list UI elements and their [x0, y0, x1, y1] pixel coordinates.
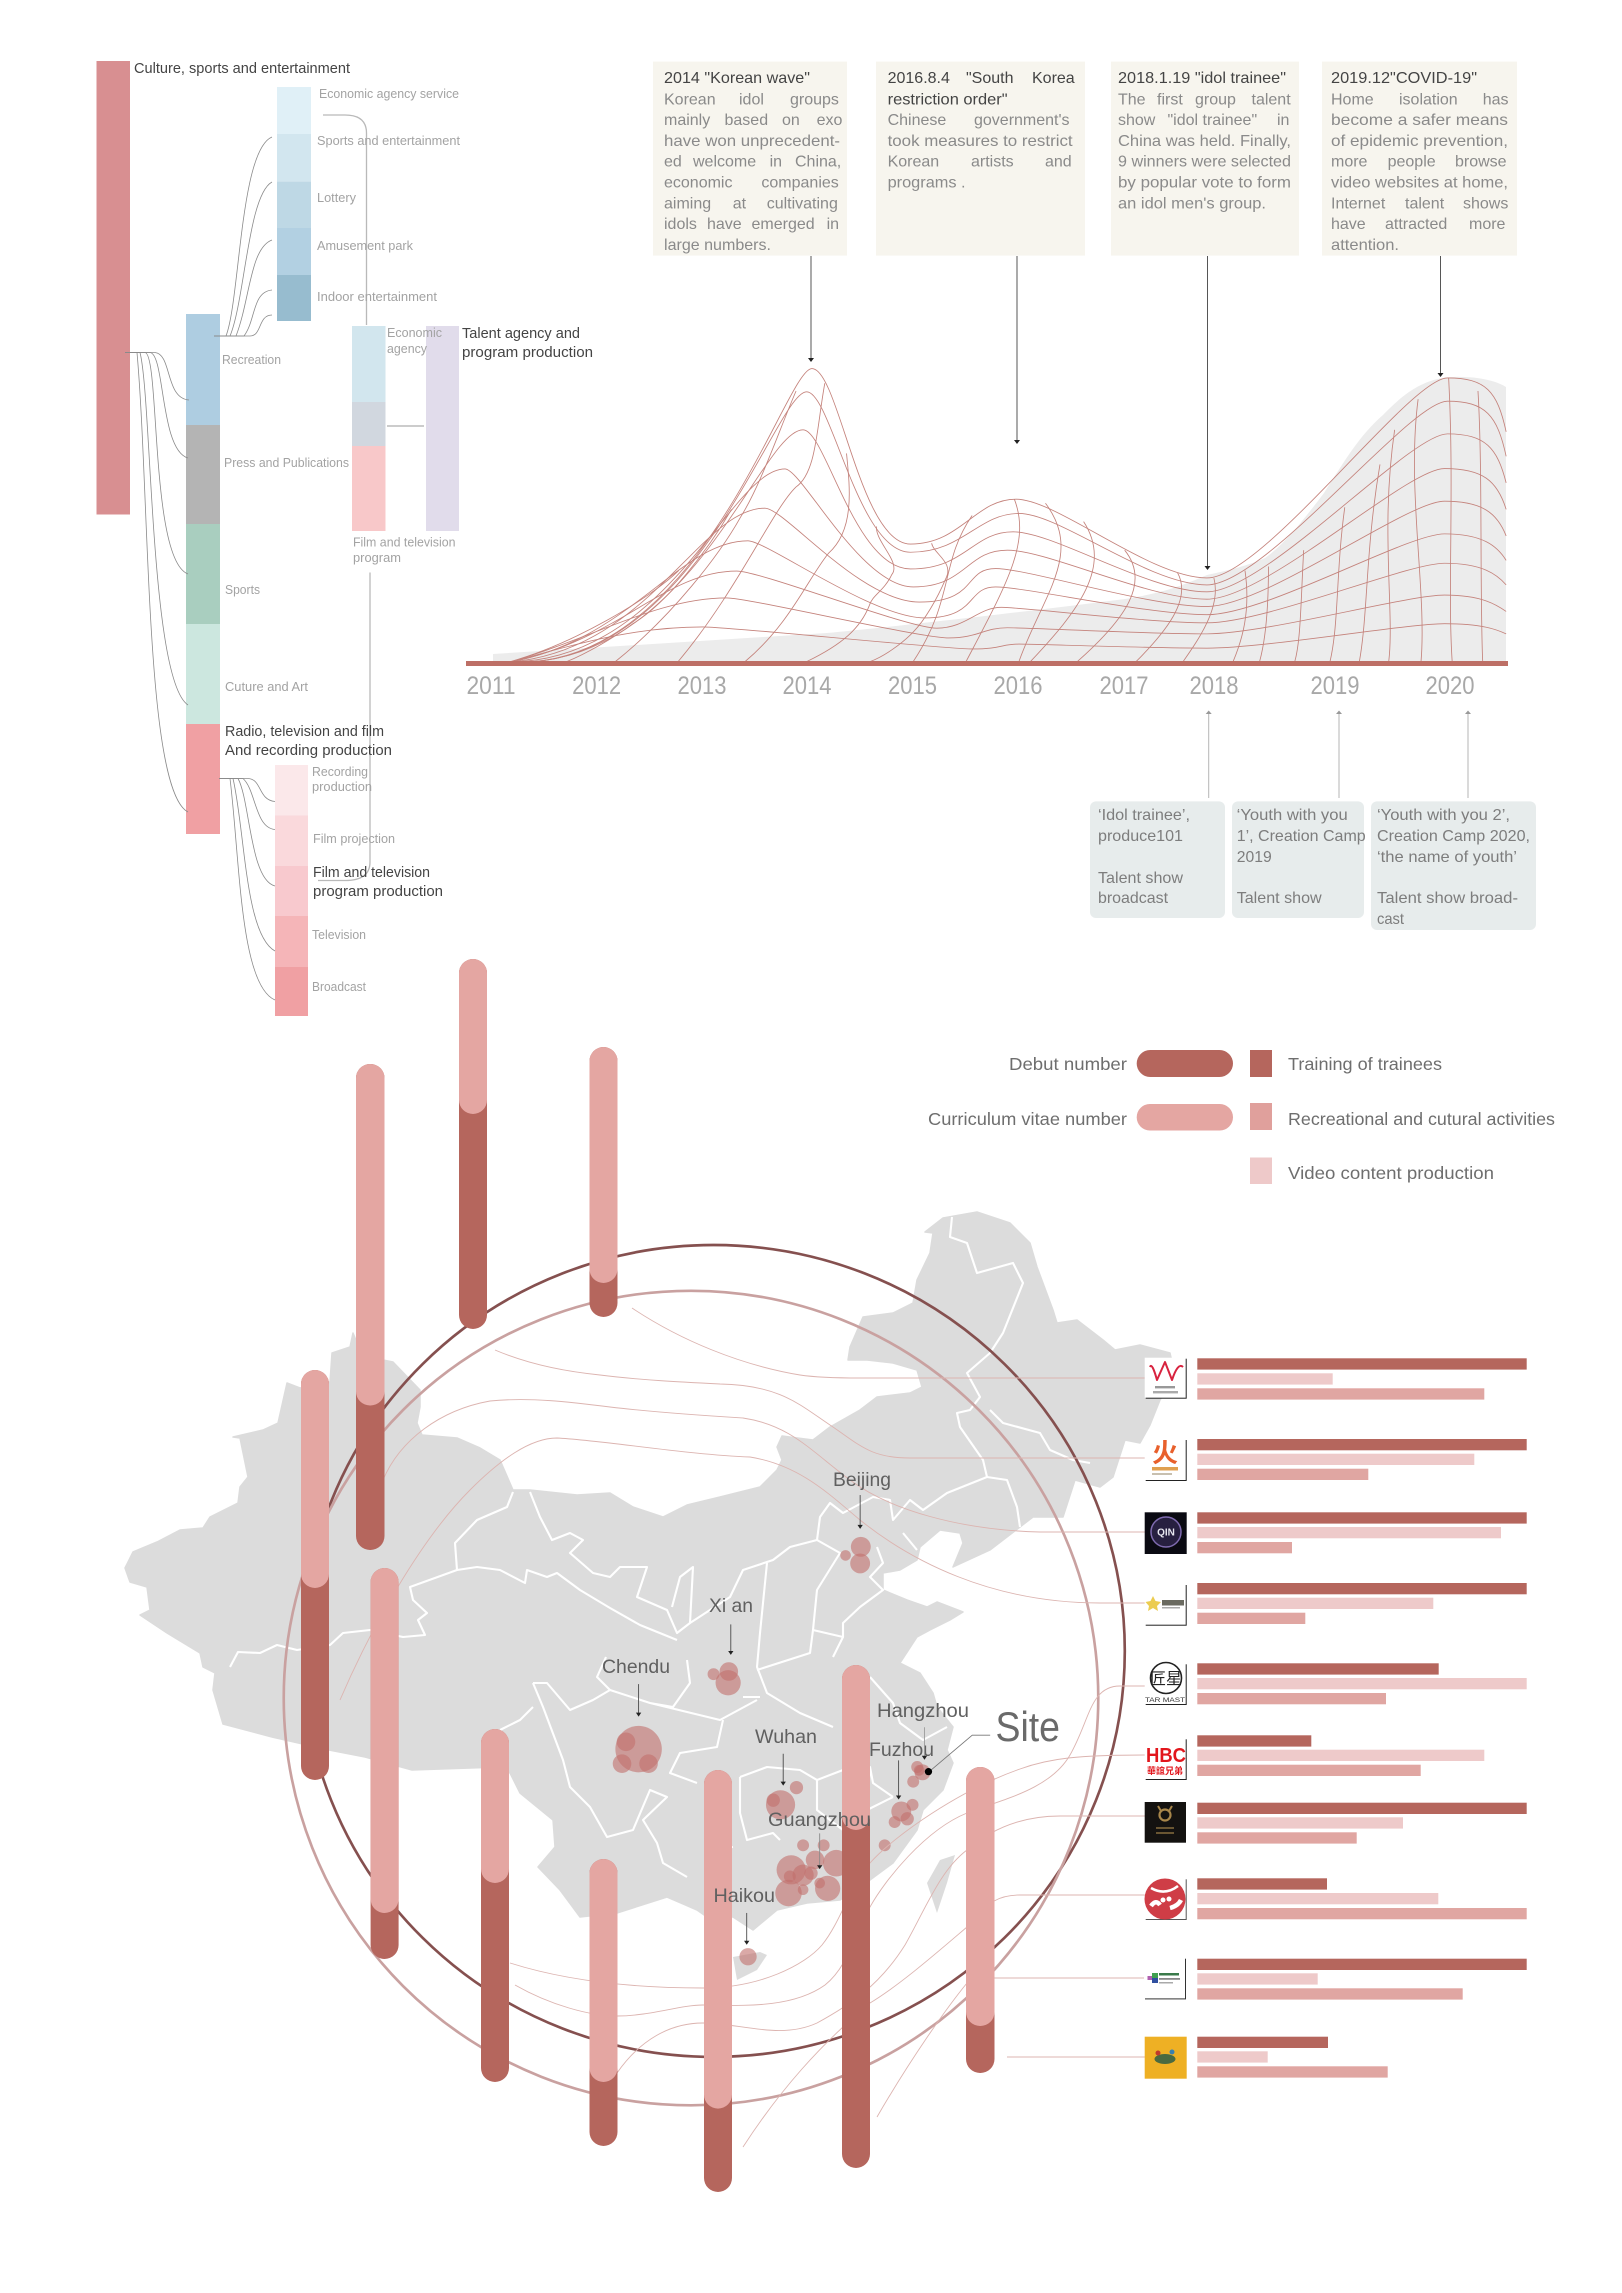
- logo: red circle: [1144, 1878, 1187, 1920]
- callout: 2014 Korean wave: on: [782, 112, 800, 129]
- callout: 2018 programmes: Talent show: [1098, 870, 1183, 887]
- callout: 2014 Korean wave: based: [724, 112, 768, 129]
- callout: 2019 programmes: 2019: [1237, 849, 1272, 866]
- callout: 2019 COVID-19: attracted: [1385, 216, 1447, 233]
- legend: Curriculum vitae number: [928, 1109, 1127, 1129]
- city labels and arrows: Haikou: [714, 1885, 775, 1907]
- pill: bar 3: [459, 959, 487, 1329]
- connector curves: main to sectors: [125, 352, 189, 812]
- callout: 2016 South Korea restriction order: Korea: [1032, 70, 1075, 87]
- callout: 2016 South Korea restriction order: Korean: [888, 154, 939, 170]
- callout: 2019 COVID-19: attention.: [1331, 237, 1399, 254]
- grey background area: [493, 377, 1506, 661]
- pill: bar 7: [590, 1859, 618, 2146]
- callout: 2020 programmes: cast: [1377, 911, 1405, 928]
- callout: 2019 COVID-19: of epidemic prevention,: [1331, 133, 1508, 150]
- labels: classification tree: Lottery: [317, 190, 356, 205]
- year axis labels: 2017: [1100, 672, 1148, 700]
- callout: 2016 South Korea restriction order: artists: [971, 154, 1014, 170]
- callout: 2019 COVID-19: [1322, 62, 1517, 256]
- year axis labels: 2016: [994, 672, 1042, 700]
- labels: classification tree: Film projection: [313, 831, 395, 846]
- callout: 2019 COVID-19: browse: [1455, 154, 1507, 170]
- callout: 2018 idol trainee: "idol trainee": [1168, 112, 1257, 129]
- callout: 2014 Korean wave: aiming: [664, 196, 711, 212]
- labels: classification tree: Economic: [387, 325, 442, 340]
- callout: 2014 Korean wave: cultivating: [767, 196, 838, 212]
- labels: classification tree: program production: [462, 344, 593, 361]
- row: company 10: [1145, 2037, 1388, 2079]
- callout: 2019 COVID-19: shows: [1463, 196, 1508, 212]
- logo: HBC: HBC: [1146, 1745, 1186, 1767]
- callout: 2018 idol trainee: China was held. Finally,: [1118, 133, 1291, 150]
- city labels and arrows: Beijing: [833, 1469, 891, 1491]
- callout: 2016 South Korea restriction order: [876, 62, 1085, 256]
- logo: HBC: [1145, 1738, 1187, 1780]
- row: company 6: [1145, 1735, 1484, 1780]
- pill: bar 2: [356, 1064, 384, 1550]
- city labels and arrows: Site: [996, 1703, 1060, 1750]
- row: company 8: [1144, 1878, 1527, 1920]
- labels: classification tree: Sports: [225, 582, 260, 597]
- logo: star master: [1145, 1662, 1187, 1705]
- callout: 2016 South Korea restriction order: and: [1045, 154, 1072, 170]
- labels: classification tree: Film and television: [313, 864, 430, 881]
- callout: 2018 programmes: ‘Idol trainee’,: [1098, 807, 1190, 824]
- callout: 2016 South Korea restriction order: Chinese: [888, 112, 946, 129]
- arrows: programmes to years: [1206, 710, 1471, 798]
- callout: 2018 idol trainee: 2018.1.19 "idol trainee": [1118, 70, 1286, 87]
- callout: 2019 COVID-19: more: [1331, 154, 1368, 170]
- callout: 2019 COVID-19: people: [1388, 154, 1436, 170]
- callout: 2016 South Korea restriction order: programs .: [888, 174, 966, 192]
- callout: 2018 idol trainee: The: [1118, 92, 1146, 108]
- panel: company bars and logos: [1144, 1358, 1527, 2079]
- bar: talent agency and program production: [426, 326, 459, 531]
- city labels and arrows: Chendu: [602, 1656, 670, 1678]
- logo: QIN: QIN: [1157, 1528, 1175, 1538]
- pill: bar 8: [704, 1770, 732, 2192]
- callout: 2016 South Korea restriction order: 2016.8.4: [888, 70, 950, 87]
- callout: 2019 COVID-19: have: [1331, 216, 1366, 233]
- panel: timeline event boxes: [653, 62, 1517, 256]
- callout: 2016 South Korea restriction order: government's: [974, 112, 1070, 129]
- callout: 2014 Korean wave: [653, 62, 847, 256]
- callout: 2014 Korean wave: ed: [664, 154, 682, 170]
- chart: trend mesh area 2011-2020: [466, 369, 1508, 700]
- connector curves: radio television film: [219, 778, 275, 1000]
- logo: black and gold: [1145, 1802, 1186, 1843]
- legend: Recreational and cutural activities: [1288, 1109, 1555, 1129]
- callout: 2019 COVID-19: isolation: [1399, 92, 1458, 108]
- callout: 2014 Korean wave: in: [827, 216, 839, 233]
- labels: classification tree: Cuture and Art: [225, 679, 308, 694]
- pill bars: debut and curriculum vitae numbers: [301, 959, 994, 2192]
- labels: classification tree: Economic agency service: [319, 86, 459, 101]
- row: company 2: [1145, 1433, 1527, 1481]
- callout: 2020 programmes: [1371, 801, 1536, 930]
- city labels and arrows: Hangzhou: [877, 1700, 969, 1722]
- callout: 2020 programmes: Talent show broad-: [1377, 890, 1518, 907]
- logo: yellow star: [1145, 1584, 1187, 1626]
- pill: bar 1: [301, 1370, 329, 1780]
- legend: Video content production: [1288, 1163, 1494, 1183]
- logo: star master: 匠星: [1150, 1665, 1182, 1689]
- logo: QIN: [1145, 1512, 1187, 1554]
- callout: 2014 Korean wave: groups: [790, 92, 839, 108]
- callout: 2014 Korean wave: 2014 "Korean wave": [664, 70, 810, 87]
- labels: classification tree: Broadcast: [312, 979, 366, 994]
- map of China with provinces: [125, 1212, 1175, 2147]
- arrows: event boxes to chart: [808, 256, 1444, 570]
- callout: 2018 idol trainee: first: [1157, 92, 1183, 108]
- labels: classification tree: Radio, television and film: [225, 723, 384, 740]
- legend: Debut number: [1009, 1054, 1127, 1074]
- row: company 1: [1145, 1358, 1527, 1400]
- city labels and arrows: Wuhan: [755, 1726, 817, 1748]
- callout: 2019 COVID-19: more: [1469, 216, 1506, 233]
- labels: classification tree: Recording: [312, 764, 368, 779]
- row: company 3: [1145, 1512, 1527, 1554]
- callout: 2018 idol trainee: 9 winners were selected: [1118, 154, 1291, 170]
- row: company 4: [1145, 1583, 1527, 1626]
- stacked bar: five sectors: [186, 314, 220, 834]
- callout: 2018 idol trainee: show: [1118, 112, 1156, 129]
- city labels and arrows: [602, 1469, 1060, 1945]
- callout: 2016 South Korea restriction order: took measures to restrict: [888, 133, 1073, 150]
- callout: 2014 Korean wave: have: [707, 216, 742, 233]
- year axis labels: 2020: [1426, 672, 1474, 700]
- company location bubbles: [613, 1537, 930, 1965]
- connector curves: recreation: [214, 137, 272, 336]
- labels: classification tree: [134, 60, 593, 994]
- labels: classification tree: production: [312, 779, 372, 794]
- callout: 2018 idol trainee: by popular vote to form: [1118, 174, 1291, 192]
- callout: 2014 Korean wave: economic: [664, 174, 732, 192]
- labels: classification tree: agency: [387, 341, 427, 356]
- callout: 2019 programmes: Talent show: [1237, 890, 1322, 907]
- year axis labels: 2013: [678, 672, 726, 700]
- labels: classification tree: Recreation: [222, 352, 281, 367]
- logo: orange flame: 火: [1152, 1433, 1178, 1470]
- stacked bar: talent agency components: [352, 326, 386, 531]
- bar: culture sports and entertainment: [96, 61, 130, 514]
- panel: company map: [125, 959, 1175, 2192]
- labels: classification tree: Indoor entertainment: [317, 289, 437, 304]
- stacked bar: radio television film sub-sectors: [275, 765, 308, 1016]
- year axis labels: 2014: [782, 672, 832, 700]
- callout: 2019 COVID-19: has: [1483, 92, 1508, 108]
- callout: 2016 South Korea restriction order: restriction order": [888, 92, 1008, 108]
- callout: 2020 programmes: ‘Youth with you 2’,: [1377, 807, 1510, 824]
- year axis labels: 2015: [888, 672, 937, 700]
- callout: 2019 programmes: [1232, 801, 1366, 918]
- labels: classification tree: program production: [313, 883, 443, 900]
- year axis labels: [466, 672, 1474, 700]
- callout: 2019 COVID-19: video websites at home,: [1331, 174, 1508, 192]
- callout: 2016 South Korea restriction order: "South: [966, 70, 1014, 87]
- labels: classification tree: Sports and entertainment: [317, 133, 460, 148]
- labels: classification tree: Amusement park: [317, 238, 413, 253]
- labels: classification tree: Film and television: [353, 534, 456, 550]
- callout: 2018 programmes: produce101: [1098, 828, 1183, 845]
- callout: 2018 programmes: [1090, 801, 1225, 918]
- callout: 2018 idol trainee: [1111, 62, 1299, 256]
- stacked bar: recreation sub-sectors: [277, 87, 311, 321]
- labels: classification tree: And recording production: [225, 742, 392, 759]
- legend: Training of trainees: [1288, 1054, 1442, 1074]
- callout: 2019 COVID-19: talent: [1405, 196, 1445, 212]
- legend: [928, 1050, 1555, 1184]
- pill: bar 5: [371, 1568, 399, 1959]
- logo: coloured blocks: [1144, 1958, 1186, 1999]
- callout: 2020 programmes: ‘the name of youth’: [1377, 849, 1517, 866]
- year axis labels: 2018: [1190, 672, 1238, 700]
- pill: bar 10: [966, 1767, 994, 2073]
- callout: 2018 programmes: broadcast: [1098, 890, 1169, 907]
- callout: 2014 Korean wave: at: [733, 196, 747, 212]
- callout: 2019 COVID-19: 2019.12"COVID-19": [1331, 70, 1477, 87]
- logo: star master: TAR MAST: [1145, 1697, 1185, 1704]
- panel: industry classification tree: [96, 60, 593, 1016]
- pill: bar 9: [842, 1665, 870, 2168]
- row: company 9: [1144, 1958, 1527, 2000]
- callout: 2014 Korean wave: China,: [795, 154, 841, 170]
- pill: bar 6: [481, 1729, 509, 2082]
- callout: 2014 Korean wave: large numbers.: [664, 237, 771, 254]
- callout: 2018 idol trainee: group: [1195, 92, 1236, 108]
- callout: 2019 programmes: ‘Youth with you: [1237, 807, 1348, 824]
- callout: 2019 COVID-19: Home: [1331, 92, 1374, 108]
- labels: classification tree: Press and Publications: [224, 455, 349, 470]
- callout: 2014 Korean wave: in: [770, 154, 782, 170]
- labels: classification tree: Culture, sports and entertainment: [134, 60, 351, 77]
- row: company 5: [1145, 1662, 1527, 1705]
- year axis labels: 2011: [466, 672, 516, 700]
- callout: 2020 programmes: Creation Camp 2020,: [1377, 828, 1530, 845]
- link lines between talent agency and sub-sectors: [318, 115, 424, 880]
- callout: 2014 Korean wave: have won unprecedent-: [664, 133, 840, 150]
- city labels and arrows: Guangzhou: [768, 1809, 871, 1831]
- year axis labels: 2019: [1310, 672, 1360, 700]
- callout: 2014 Korean wave: companies: [761, 174, 839, 192]
- labels: classification tree: Television: [312, 927, 366, 942]
- axis baseline: [466, 661, 1508, 666]
- callout: 2018 idol trainee: in: [1277, 112, 1289, 129]
- panel: talent show programmes: [1090, 710, 1536, 930]
- logo: orange flame: [1145, 1433, 1187, 1481]
- logo: HBC: 華誼兄弟: [1147, 1764, 1183, 1777]
- labels: classification tree: program: [353, 550, 401, 565]
- callout: 2014 Korean wave: mainly: [664, 112, 710, 129]
- connector curves to company logos: [340, 1308, 1145, 2147]
- callout: 2014 Korean wave: idols: [664, 216, 697, 233]
- mesh curves: [510, 369, 1506, 662]
- callout: 2018 idol trainee: an idol men's group.: [1118, 196, 1266, 212]
- labels: classification tree: Talent agency and: [462, 325, 580, 342]
- callout: 2014 Korean wave: idol: [739, 92, 764, 108]
- logo: red zigzag: [1145, 1358, 1187, 1399]
- callout: 2014 Korean wave: Korean: [664, 92, 716, 108]
- callout: 2014 Korean wave: exo: [817, 112, 842, 129]
- pill: bar 4: [590, 1047, 618, 1317]
- callout: 2018 idol trainee: talent: [1252, 92, 1291, 108]
- callout: 2014 Korean wave: welcome: [692, 154, 756, 170]
- rings: [284, 1245, 1125, 2105]
- city labels and arrows: Xi an: [709, 1595, 753, 1617]
- callout: 2019 COVID-19: Internet: [1331, 196, 1386, 212]
- city labels and arrows: Fuzhou: [869, 1739, 934, 1761]
- row: company 7: [1145, 1802, 1527, 1844]
- year axis labels: 2012: [572, 672, 621, 700]
- callout: 2014 Korean wave: emerged: [752, 216, 815, 233]
- logo: yellow square: [1145, 2037, 1187, 2079]
- callout: 2019 COVID-19: become a safer means: [1331, 112, 1508, 129]
- callout: 2019 programmes: 1’, Creation Camp: [1237, 828, 1366, 845]
